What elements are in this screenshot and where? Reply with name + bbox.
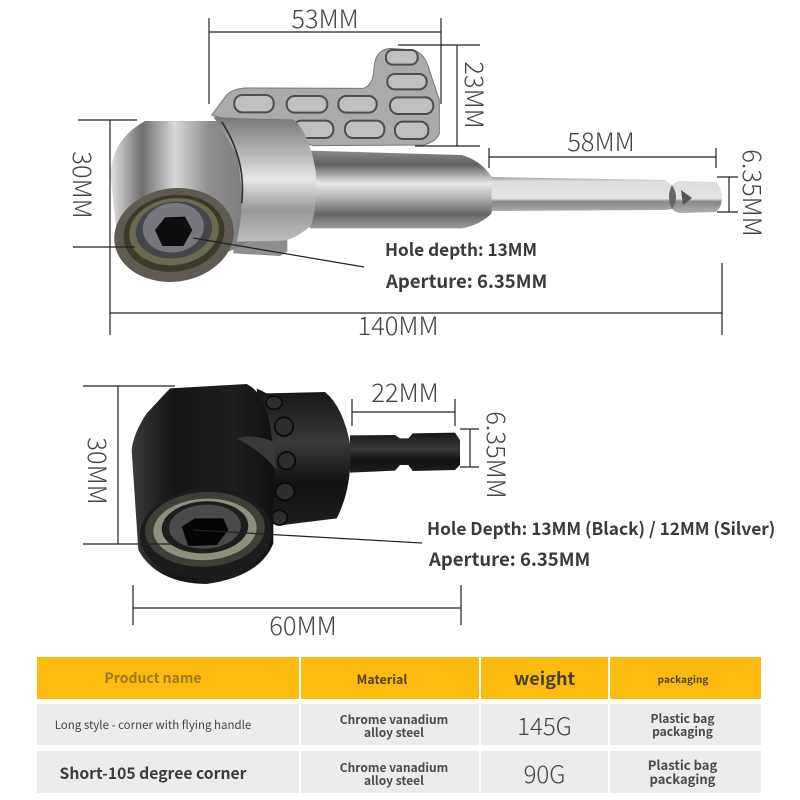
black hole depth: Hole Depth: 13MM (Black) / 12MM (Silver): [427, 515, 775, 540]
black aperture: Aperture: 6.35MM: [428, 546, 590, 572]
row 2 name: Short-105 degree corner: [60, 760, 246, 784]
6.35MM bracket: [717, 177, 738, 212]
label 58MM: 58MM: [567, 122, 635, 159]
label 30MM: 30MM: [65, 151, 102, 219]
specification table: [37, 657, 761, 793]
dimension labels: [65, 0, 772, 643]
silver long angle adapter: [108, 48, 722, 290]
row 1 weight: 145G: [517, 707, 572, 742]
row 1 packaging: packaging: [652, 722, 713, 740]
dimension lines: [73, 18, 738, 625]
header: weight: [481, 657, 608, 699]
row 2 packaging: packaging: [650, 769, 715, 788]
label 22MM: 22MM: [371, 373, 439, 410]
row 2 material: alloy steel: [364, 772, 424, 789]
row 2 packaging: [610, 751, 761, 793]
black leader line: [193, 530, 422, 543]
callout text: [385, 236, 775, 572]
silver angled head: [111, 121, 253, 270]
row 1 material: [301, 704, 479, 745]
row 1 packaging: [610, 704, 761, 745]
row 2 packaging: Plastic bag: [648, 755, 717, 774]
silver flying handle plate: [212, 48, 439, 146]
53MM bracket: [209, 18, 441, 104]
row 1 name: [37, 704, 299, 745]
lower 30MM bracket: [83, 386, 175, 544]
silver lower clip: [233, 237, 287, 256]
row 2 material: Chrome vanadium: [340, 759, 448, 776]
black bearing: [138, 485, 274, 582]
label lower 30MM: 30MM: [80, 437, 117, 505]
black hex bit: [350, 433, 460, 473]
label lower 6.35MM: 6.35MM: [479, 411, 516, 499]
black short angle adapter: [132, 384, 460, 584]
row 1 name: Long style - corner with flying handle: [55, 716, 251, 732]
black angled head: [132, 384, 275, 584]
silver shaft: [310, 151, 492, 228]
60MM bracket: [133, 585, 461, 625]
silver hex bit: [489, 177, 722, 213]
header: product name: Product name: [104, 668, 202, 688]
row 1 weight: [481, 704, 608, 745]
lower 6.35MM bracket: [460, 429, 479, 467]
label 53MM: 53MM: [291, 0, 359, 36]
row 2 material: [301, 751, 479, 793]
black collar knobs: [266, 396, 295, 525]
label 6.35MM: 6.35MM: [735, 149, 772, 237]
header: material: [301, 657, 479, 699]
row 2 name: [37, 751, 299, 793]
silver collar groove: [222, 122, 242, 203]
row 1 material: alloy steel: [364, 724, 424, 740]
header: packaging: [610, 657, 761, 699]
row 1 material: Chrome vanadium: [340, 710, 448, 728]
22MM bracket: [352, 399, 455, 426]
label 60MM: 60MM: [269, 606, 337, 643]
140MM bracket: [110, 263, 722, 335]
black head shoulder highlight: [237, 436, 277, 470]
header: packaging: packaging: [658, 670, 708, 686]
23MM bracket: [398, 45, 480, 146]
silver bearing: [108, 180, 240, 290]
row 1 packaging: Plastic bag: [650, 710, 715, 726]
silver leader line: [193, 238, 364, 267]
label 140MM: 140MM: [357, 306, 439, 343]
58MM bracket: [489, 148, 716, 168]
black collar: [257, 388, 351, 525]
silver aperture: Aperture: 6.35MM: [385, 268, 547, 294]
silver collar: [213, 117, 316, 242]
row 2 weight: [481, 751, 608, 793]
30MM bracket: [73, 120, 137, 335]
header: weight: weight: [514, 665, 575, 691]
header: product name: [37, 657, 299, 699]
silver hole depth: Hole depth: 13MM: [385, 236, 537, 261]
header: material: Material: [357, 668, 407, 688]
label 23MM: 23MM: [457, 61, 494, 129]
row 2 weight: 90G: [524, 754, 565, 790]
